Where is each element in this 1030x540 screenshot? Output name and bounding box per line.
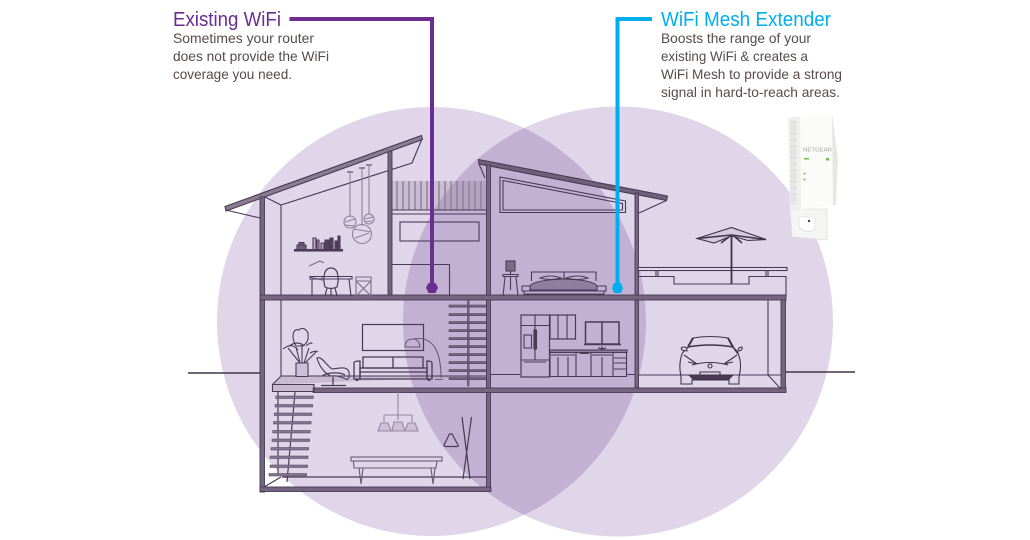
wall panel and box xyxy=(392,222,479,296)
upper staircase xyxy=(449,300,486,386)
blue pointer: WiFi Mesh Extender xyxy=(612,19,652,293)
plant xyxy=(283,328,318,376)
wall plate xyxy=(790,209,827,240)
pendant lamps xyxy=(344,165,374,244)
heading: Existing WiFi: Existing WiFi xyxy=(173,9,281,31)
house xyxy=(225,136,787,492)
ground line right xyxy=(786,371,855,373)
bookshelf xyxy=(294,236,342,251)
bedroom window xyxy=(500,177,626,212)
text: WiFi Mesh Extender description: Boosts the range of your xyxy=(661,30,811,46)
text: Existing WiFi description: Sometimes your router xyxy=(173,30,314,46)
coverage circles xyxy=(217,106,833,536)
upper-left railing xyxy=(392,181,486,214)
text: Existing WiFi description: does not provide the WiFi xyxy=(173,48,329,64)
garage lines xyxy=(638,300,781,389)
structural walls and floors xyxy=(260,151,786,492)
ground line left xyxy=(188,372,261,374)
umbrella xyxy=(697,228,766,284)
car xyxy=(680,336,742,384)
left stair platform xyxy=(272,376,487,392)
sofa xyxy=(354,357,432,381)
night stand and lamp xyxy=(503,261,518,296)
icon: WiFi mesh extender device xyxy=(788,113,838,240)
lower staircase xyxy=(269,392,313,482)
inner living room wall xyxy=(280,300,282,376)
lounge chair xyxy=(317,358,349,386)
purple pointer: Existing WiFi xyxy=(290,19,438,293)
triangle decor xyxy=(444,434,458,446)
terrace xyxy=(638,268,787,296)
icon: WiFi mesh extender device: NETGEAR xyxy=(803,148,832,154)
purple end marker xyxy=(426,283,438,293)
text: Existing WiFi description: coverage you need. xyxy=(173,66,292,82)
text: WiFi Mesh Extender description: existing WiFi & creates a xyxy=(661,48,808,64)
text: WiFi Mesh Extender description: WiFi Mesh to provide a strong xyxy=(661,66,842,82)
lower floor line xyxy=(264,477,487,487)
chandelier xyxy=(378,392,418,431)
dining table xyxy=(351,457,442,484)
right roof xyxy=(478,160,668,213)
desk and chair xyxy=(309,261,371,296)
text: Existing WiFi description xyxy=(173,30,329,82)
text: WiFi Mesh Extender description xyxy=(661,30,842,100)
heading: WiFi Mesh Extender: WiFi Mesh Extender xyxy=(661,9,831,31)
kitchen xyxy=(490,315,635,377)
text: WiFi Mesh Extender description: signal in hard-to-reach areas. xyxy=(661,84,840,100)
floor lamp xyxy=(405,338,443,380)
bed xyxy=(522,272,606,296)
crossed sticks xyxy=(462,417,472,479)
blue end marker xyxy=(612,283,623,293)
left roof xyxy=(225,136,422,298)
painting xyxy=(362,324,424,350)
